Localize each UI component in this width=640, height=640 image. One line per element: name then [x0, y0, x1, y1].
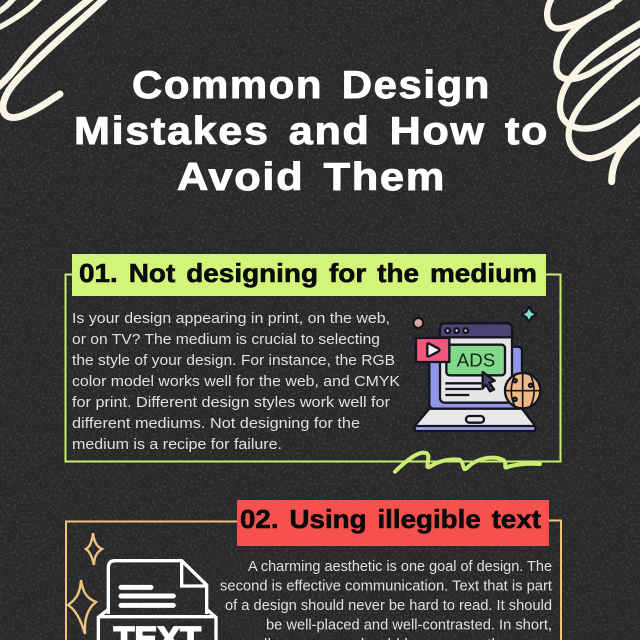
body text: 01: the style of your design. For instance, the RGB [72, 352, 395, 369]
body text: 02: A charming aesthetic is one goal of design. The [248, 558, 552, 575]
body text: 01: different mediums. Not designing for the [72, 415, 360, 432]
body text: 01: Is your design appearing in print, on the web, [72, 310, 390, 327]
title: Avoid Them [177, 156, 446, 199]
heading banner: 02 [237, 500, 549, 546]
body text: 02 [220, 558, 553, 640]
decorative scribble: top left [0, 0, 106, 118]
body text: 01: or on TV? The medium is crucial to selecting [72, 331, 380, 348]
heading banner: 01: 01. Not designing for the medium [79, 258, 537, 288]
title [74, 64, 549, 199]
body text: 01: color model works well for the web, and CMYK [72, 373, 400, 390]
panel frame: green [66, 274, 560, 462]
heading banner: 01 [72, 254, 546, 296]
decorative green squiggle [395, 453, 540, 472]
decorative scribble: top right [547, 0, 640, 182]
icon: text document [98, 561, 216, 640]
icon: laptop with ads [413, 307, 540, 431]
panel: 01 not designing for the medium [66, 254, 560, 472]
body text: 01: medium is a recipe for failure. [72, 436, 282, 453]
icon: laptop with ads: ADS [457, 350, 495, 371]
body text: 02: of a design should never be hard to read. It should [225, 597, 552, 614]
title: Mistakes and How to [74, 110, 549, 153]
panel frame: tan [66, 520, 561, 640]
title: Common Design [132, 64, 491, 107]
body text: 01: for print. Different design styles work well for [72, 394, 390, 411]
panel: 02 using illegible text [66, 500, 561, 640]
icon: sparkles [68, 533, 102, 634]
heading banner: 02: 02. Using illegible text [240, 504, 541, 534]
body text: 02: second is effective communication. Text that is part [220, 578, 553, 594]
body text: 01 [72, 310, 400, 453]
body text: 02: be well-placed and well-contrasted. In short, [266, 616, 552, 634]
